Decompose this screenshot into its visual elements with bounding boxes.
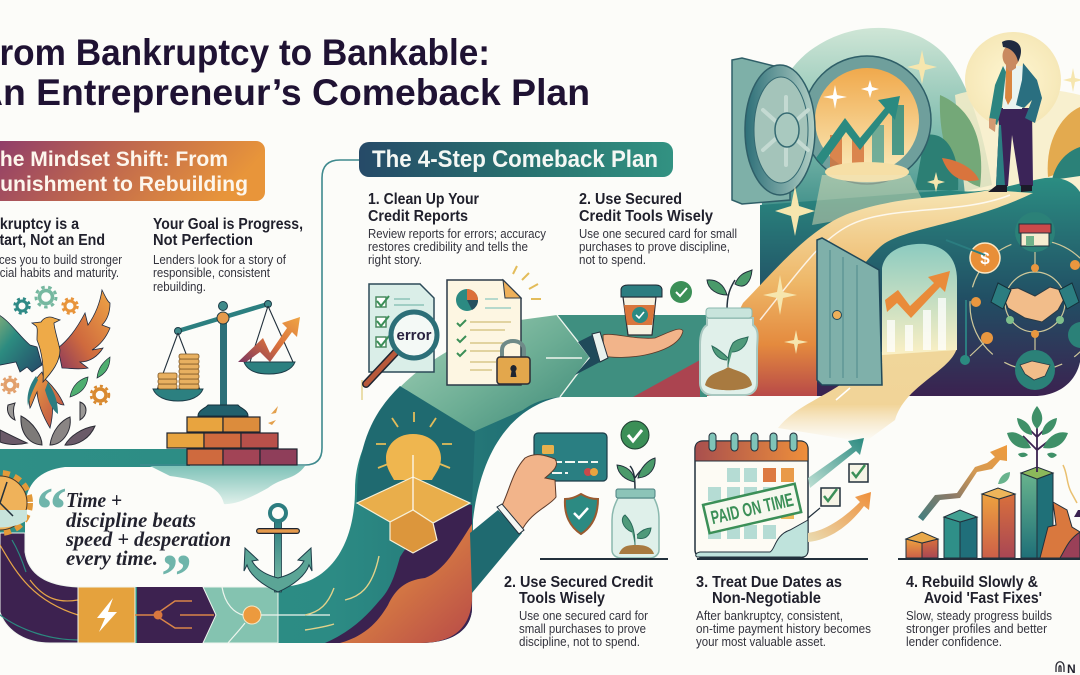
text: step 4 bottom: lender confidence. bbox=[906, 635, 1002, 649]
post foot bbox=[198, 405, 248, 416]
finials bbox=[174, 300, 272, 334]
head bbox=[1002, 45, 1020, 67]
main road bbox=[695, 190, 1033, 396]
text: step 2 bottom: small purchases to prove bbox=[519, 622, 646, 636]
hand bbox=[603, 329, 683, 357]
base leaves bbox=[0, 402, 95, 445]
text: step 1 top: restores credibility and tells the bbox=[368, 240, 528, 254]
text: step 2 top: not to spend. bbox=[579, 253, 646, 267]
day cells bbox=[708, 468, 794, 539]
check mark bbox=[676, 288, 687, 296]
cup body bbox=[623, 297, 656, 335]
shank bbox=[274, 520, 282, 592]
text: step 2 top: Use one secured card for small bbox=[579, 227, 737, 241]
list lines bbox=[394, 299, 424, 305]
bar 3 bbox=[982, 488, 1015, 558]
circuit node bbox=[154, 610, 162, 620]
text: step 4 bottom bbox=[906, 574, 1052, 649]
band drip bbox=[150, 466, 305, 504]
mound bbox=[825, 162, 909, 182]
leaves bbox=[707, 270, 752, 295]
hill chevron bbox=[557, 315, 707, 397]
flukes bbox=[244, 548, 312, 592]
banner text bbox=[0, 147, 248, 196]
brick chips bbox=[268, 406, 278, 425]
road line bbox=[760, 195, 1010, 320]
vault light rays bbox=[812, 175, 925, 225]
halo behind figure bbox=[965, 32, 1061, 128]
post bbox=[220, 322, 227, 406]
purple fragment bbox=[1074, 510, 1080, 517]
bush bbox=[915, 134, 958, 190]
network handshake bbox=[946, 212, 1080, 390]
man figure bbox=[988, 40, 1042, 192]
rubble bbox=[1040, 502, 1080, 558]
icon: checklist document bbox=[369, 284, 434, 372]
check mark bbox=[628, 430, 642, 441]
right wing bbox=[58, 290, 110, 369]
text: step 4 bottom: 4. Rebuild Slowly & bbox=[906, 574, 1038, 591]
node: small dots bbox=[971, 260, 1080, 344]
box top bbox=[357, 477, 470, 523]
text: your goal is progress: Lenders look for a story of bbox=[153, 253, 286, 267]
error label: error bbox=[396, 327, 432, 344]
leg highlight bbox=[996, 125, 1005, 186]
connector tick bbox=[808, 508, 820, 518]
rubble purple bbox=[1060, 532, 1080, 558]
band orange wave bbox=[340, 524, 472, 643]
pivot bbox=[217, 312, 229, 324]
text: step 1 top: Review reports for errors; accuracy bbox=[368, 227, 547, 241]
teal circuit lines bbox=[0, 540, 78, 640]
teal pipes bbox=[946, 240, 985, 358]
sparkles bbox=[763, 50, 1080, 354]
jacket left bbox=[989, 66, 1006, 125]
gold leaf bbox=[1048, 107, 1080, 177]
text: your goal is progress: responsible, consistent bbox=[153, 266, 270, 280]
orange leaf bbox=[942, 158, 979, 181]
lid bbox=[616, 489, 655, 498]
icon: scales bbox=[153, 300, 300, 465]
check marks bbox=[377, 296, 389, 346]
text: your goal is progress: Your Goal is Progress, bbox=[153, 216, 303, 233]
text: step 3 bottom: on-time payment history becomes bbox=[696, 622, 871, 636]
bricks bbox=[167, 417, 297, 465]
coins bbox=[158, 354, 199, 389]
icon: magnifier bbox=[366, 312, 437, 384]
band segment: purple arrow bbox=[137, 587, 216, 643]
green hill bbox=[383, 315, 707, 432]
stock bbox=[259, 528, 297, 534]
jar lid bbox=[706, 308, 752, 318]
tail flames bbox=[29, 372, 64, 428]
teal arrow bbox=[808, 438, 864, 488]
quote: discipline beats bbox=[66, 508, 196, 532]
text: step 3 bottom: Non-Negotiable bbox=[712, 590, 821, 607]
text: step 3 bottom: your most valuable asset. bbox=[696, 635, 826, 649]
stock fill bbox=[259, 529, 297, 533]
text: step 3 bottom bbox=[696, 574, 871, 649]
node: right circle bbox=[1068, 322, 1080, 348]
footer logo bbox=[1056, 662, 1076, 675]
bulb rays bbox=[376, 412, 452, 468]
green ticks bbox=[457, 320, 466, 356]
band segment: light teal bbox=[203, 587, 278, 643]
inner plant bbox=[622, 515, 651, 545]
report lines bbox=[485, 299, 511, 308]
sleeve bbox=[575, 335, 600, 375]
ground line 1 bbox=[540, 558, 668, 560]
hill chevron outline bbox=[546, 315, 590, 397]
right pan bbox=[244, 362, 295, 374]
road dashes bbox=[836, 362, 882, 400]
node: handshake centre bbox=[991, 283, 1079, 322]
green leaves bbox=[70, 357, 110, 397]
second road bbox=[778, 348, 957, 442]
check box 1 bbox=[849, 464, 868, 482]
quote: speed + desperation bbox=[65, 527, 231, 551]
text: step 2 top bbox=[579, 191, 737, 267]
icon: lightning bbox=[97, 598, 117, 632]
vault growth arrow bbox=[816, 96, 900, 165]
cuff bbox=[592, 332, 608, 362]
hand left bbox=[989, 118, 996, 132]
inner plant bbox=[712, 337, 748, 367]
opening quote mark: “ bbox=[36, 476, 67, 544]
text: step 2 top: Credit Tools Wisely bbox=[579, 208, 713, 225]
card number bbox=[552, 462, 598, 473]
sleeve bbox=[470, 510, 522, 593]
rays bbox=[513, 266, 541, 299]
shield check bbox=[574, 508, 588, 518]
node: lower handshake bbox=[1015, 350, 1055, 390]
stems bbox=[712, 280, 735, 310]
text: your goal is progress: Not Perfection bbox=[153, 232, 253, 249]
closing quote mark: ” bbox=[161, 543, 192, 611]
teal leaf bbox=[1052, 147, 1080, 180]
page curl bbox=[696, 520, 808, 557]
text: step 2 bottom bbox=[504, 574, 653, 649]
text: step 1 top: Credit Reports bbox=[368, 208, 468, 225]
check box 2 bbox=[821, 488, 840, 506]
arch background bbox=[762, 28, 992, 240]
vault door bbox=[732, 58, 815, 204]
legs bbox=[996, 108, 1033, 186]
circuit lines bbox=[0, 545, 78, 615]
neck bbox=[1006, 62, 1016, 72]
sprout bbox=[630, 459, 655, 490]
node: coin bbox=[970, 243, 1000, 273]
soil bbox=[619, 545, 654, 554]
band white strokes bbox=[305, 380, 379, 630]
text: step 2 bottom: 2. Use Secured Credit bbox=[504, 574, 653, 591]
ground line 2 bbox=[697, 558, 868, 560]
gears bbox=[2, 287, 109, 404]
icon: padlock bbox=[497, 341, 530, 384]
text: step 4 bottom: Slow, steady progress builds bbox=[906, 609, 1052, 623]
teal bobble bbox=[960, 355, 970, 365]
strings bbox=[157, 306, 293, 390]
page fold bbox=[503, 280, 521, 298]
icon: anchor bbox=[244, 505, 312, 592]
cup sleeve bbox=[624, 305, 655, 325]
icon: rising bar chart bbox=[906, 406, 1080, 558]
check badge bbox=[621, 421, 649, 449]
text: step 1 top: 1. Clean Up Your bbox=[368, 191, 479, 208]
checkboxes bbox=[376, 297, 386, 347]
icon: phoenix bbox=[0, 287, 110, 445]
panel: right illustration hero bbox=[695, 28, 1080, 442]
crack bbox=[1063, 465, 1077, 503]
node: shop bbox=[1015, 212, 1055, 252]
band circle node bbox=[243, 606, 261, 624]
zigzag arrow bbox=[918, 445, 1007, 521]
icon: shield bbox=[565, 494, 598, 534]
band purple wave bbox=[325, 503, 472, 643]
text: step 2 bottom: discipline, not to spend. bbox=[519, 635, 640, 649]
node: green dots bbox=[1006, 316, 1064, 324]
band node lines bbox=[222, 587, 330, 643]
ring bbox=[270, 505, 286, 521]
jacket right bbox=[1016, 63, 1042, 123]
jar bbox=[612, 498, 659, 558]
door bbox=[817, 238, 882, 385]
arched opening bbox=[882, 244, 957, 355]
page bbox=[695, 441, 808, 558]
bar 4 bbox=[1021, 467, 1053, 558]
text: step 2 top: 2. Use Secured bbox=[579, 191, 682, 208]
text: step 3 bottom: 3. Treat Due Dates as bbox=[696, 574, 842, 591]
network handshake: $ bbox=[980, 249, 990, 268]
vault ring bbox=[803, 56, 931, 184]
text: step 1 top bbox=[368, 191, 547, 267]
coins bbox=[705, 367, 752, 390]
rings bbox=[709, 433, 797, 451]
quote bbox=[36, 476, 231, 611]
bulb panel bbox=[357, 386, 475, 505]
left wing bbox=[0, 313, 42, 372]
sprout leaf bbox=[998, 472, 1010, 484]
icon: jar bottom bbox=[612, 458, 659, 558]
circuit branch bbox=[135, 601, 214, 628]
icon: due date arrows and checks bbox=[808, 438, 871, 542]
band segment: gold bbox=[78, 587, 135, 643]
box seam bbox=[412, 455, 414, 510]
text: step 1 top: right story. bbox=[368, 253, 422, 267]
shirt bbox=[1003, 66, 1023, 109]
opening arrow bbox=[885, 271, 950, 318]
icon: jar top bbox=[700, 270, 758, 395]
icon: coffee cup on hand bbox=[575, 281, 692, 375]
icon: bulb and box bbox=[357, 412, 470, 553]
vault chart bars bbox=[830, 105, 904, 168]
card logo bbox=[584, 468, 598, 476]
banner title: The 4-Step Comeback Plan bbox=[372, 146, 658, 173]
text: step 4 bottom: stronger profiles and better bbox=[906, 622, 1047, 636]
opening chart bars bbox=[887, 298, 946, 352]
left pan bbox=[153, 389, 203, 401]
red wedge bbox=[633, 360, 700, 397]
header bbox=[695, 441, 808, 461]
title bbox=[0, 32, 590, 113]
icon: gear clock bbox=[0, 473, 30, 533]
body and head bbox=[32, 317, 60, 382]
chip bbox=[542, 445, 554, 454]
band segment: purple left bbox=[0, 533, 78, 643]
cup badge bbox=[632, 307, 648, 323]
connector line bbox=[140, 160, 360, 465]
bar 2 bbox=[944, 510, 977, 558]
icon: calendar bbox=[695, 433, 808, 558]
text: step 2 bottom: Tools Wisely bbox=[519, 590, 605, 607]
bar 1 bbox=[906, 532, 938, 558]
text: your goal is progress bbox=[153, 216, 303, 294]
jar bbox=[700, 318, 758, 395]
icon: hand with card bbox=[470, 421, 649, 593]
text: bankruptcy is a start bbox=[0, 216, 122, 280]
text: your goal is progress: rebuilding. bbox=[153, 280, 206, 294]
text: step 2 top: purchases to prove discipline, bbox=[579, 240, 730, 254]
shoes bbox=[988, 185, 1032, 192]
cuff bbox=[497, 504, 524, 534]
quote: Time + bbox=[66, 488, 122, 512]
pie chart bbox=[456, 289, 478, 311]
cup lid bbox=[621, 285, 662, 297]
quote: every time. bbox=[66, 546, 158, 570]
hair bbox=[1002, 40, 1021, 62]
check bubble bbox=[670, 281, 692, 303]
ground line 3 bbox=[898, 558, 1080, 560]
text: step 4 bottom: Avoid 'Fast Fixes' bbox=[924, 590, 1042, 607]
orange arrow bbox=[808, 492, 871, 542]
text: step 3 bottom: After bankruptcy, consistent, bbox=[696, 609, 843, 623]
paid on time stamp: PAID ON TIME bbox=[709, 490, 796, 529]
bulb bbox=[386, 434, 441, 480]
hand bbox=[500, 455, 557, 532]
tie bbox=[1005, 67, 1012, 105]
panel: mindset banner bbox=[0, 141, 265, 201]
orange arrow bbox=[238, 317, 300, 362]
dark hill bbox=[760, 178, 1080, 396]
beam bbox=[178, 304, 268, 331]
tail teal bbox=[27, 376, 58, 414]
panel: four-step banner bbox=[359, 142, 673, 177]
panel: winding band bbox=[0, 322, 560, 643]
text: step 2 bottom: Use one secured card for bbox=[519, 609, 648, 623]
box body bbox=[390, 510, 437, 553]
icon: report document bbox=[447, 266, 541, 385]
tree bbox=[1007, 406, 1068, 472]
green leaf bbox=[940, 95, 981, 187]
card bbox=[534, 433, 607, 481]
pale gold backdrop bbox=[955, 88, 1080, 195]
leaves bbox=[617, 458, 655, 482]
